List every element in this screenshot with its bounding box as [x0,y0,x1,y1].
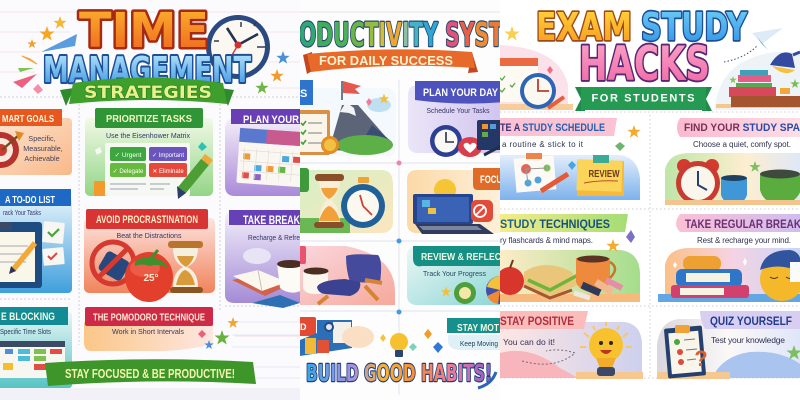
chart: eisenhower matrix: ✓ Urgent [115,152,142,159]
panel: exam study hacks [496,0,800,400]
title: STUDY: STUDY [641,5,747,49]
heading: plan your: PLAN YOUR [243,114,299,126]
icon: gear heart [454,282,476,304]
panel: time blocking [0,307,72,388]
heading: create a study schedule: TE A STUDY SCHEDULE [500,122,605,134]
icon: armchair [317,254,382,304]
icon: paper plane [724,28,783,62]
icon: pie chart [486,276,514,304]
banner: for daily success: FOR DAILY SUCCESS [319,53,453,68]
icon: cloud [243,248,271,264]
heading: prioritize tasks: PRIORITIZE TASKS [106,113,192,125]
icon: star [504,26,520,40]
icon: green diamond [615,142,625,151]
title: TIME: TIME [79,3,209,59]
banner: stay focused and be productive: STAY FOCUSED & BE PRODUCTIVE! [65,366,235,381]
heading fragment: goals: S [300,88,307,100]
icon: tablet schedule [477,120,507,155]
chart: eisenhower matrix: ✓ Important [152,153,184,159]
heading fragment red: D [300,322,307,332]
heading fragment [296,168,309,192]
banner: strategies [60,78,234,106]
card: review and reflect [407,246,514,305]
text: track your tasks: rack Your Tasks [3,210,41,217]
icon: heart badge [321,136,339,154]
text: beat the distractions: Beat the Distractions [116,233,182,240]
heading: create a study schedule [500,118,617,136]
banner: for daily success [303,49,478,74]
panel: prioritize tasks [85,108,213,199]
text: routine: a routine & stick to it [502,140,584,149]
card: create a study schedule [500,118,641,200]
footer text: build good habits: BUILD GOOD HABITS! [306,361,492,387]
icon: sleeping moon with nightcap [760,250,800,301]
illustration: plane lamp and books [715,28,800,110]
card: stay positive [500,311,643,379]
heading: pomodoro technique: THE POMODORO TECHNIQUE [93,312,205,324]
icon: check note red [42,247,65,266]
icon: star [379,94,389,103]
panel: to-do list [0,189,72,293]
icon: open book [232,270,287,296]
icon: coffee cup [303,268,328,294]
icon: calendar [236,128,300,188]
icon: no sign [471,200,493,222]
icon: tomato timer: 25° [143,273,159,284]
card: find your study space [665,118,800,205]
icon: apple [496,260,524,295]
arrow: dotted curve [522,350,575,364]
icon: no phone sign [92,242,134,284]
icon: heart bubble [458,137,482,157]
icon: pink sparkle [366,98,372,106]
heading: focus: FOCU [480,174,502,186]
icon: clock [520,73,556,109]
card: build illustration [296,317,374,356]
text: specific time slots: Specific Time Slots [0,329,51,336]
text: smart goal criteria: Achievable [24,154,60,163]
banner: for students: FOR STUDENTS [592,92,694,104]
heading: study techniques: STUDY TECHNIQUES [500,217,610,231]
title: HACKS: HACKS [579,37,710,92]
title: EXAM: EXAM [536,5,632,49]
icon: quiz clipboard [664,325,708,379]
icon: review sticky note: REVIEW [588,169,620,180]
icon: hourglass [168,241,203,293]
icon: book stack [729,70,800,107]
icon: laptop [413,194,494,234]
card: set goals illustration [297,80,396,156]
icon: target with arrow [0,131,24,168]
title: MANAGEMENT: MANAGEMENT [43,50,251,91]
icon: stars near footer [198,317,239,349]
panel: avoid procrastination [84,209,215,302]
icon: purple sparkle [626,230,635,243]
card: focus [407,168,505,234]
card: study techniques [496,214,640,302]
title: productivity system: ODUCTIVITY SYST [299,15,503,54]
icon: orange square note [94,181,105,196]
icon: hourglass [314,174,344,228]
chart: eisenhower matrix: ✓ Delegate [113,169,144,175]
icon: clock [430,125,462,157]
icon: decorative stars and confetti top left [13,16,290,94]
chart: eisenhower matrix: ✕ Eliminate [152,169,184,175]
icon: smiling light bulb [580,322,632,376]
icon: pencil [548,97,564,108]
icon: star [729,76,737,83]
icon: schedule board [0,341,65,378]
heading: review and reflect: REVIEW & REFLEC [421,251,501,263]
banner: strategies: STRATEGIES [84,83,212,103]
panel: time management strategies [0,0,312,400]
illustration: calendar and clock [496,26,573,110]
heading: stay motivated: STAY MOT [457,322,499,334]
text: schedule your tasks: Schedule Your Tasks [426,108,490,115]
chart: eisenhower matrix [105,143,190,196]
text: eisenhower matrix: Use the Eisenhower Matrix [106,133,190,140]
icon: rolled scroll [683,256,721,271]
text: choose a quiet spot: Choose a quiet, comfy spot. [693,140,791,149]
icon: clipboard with pencil [0,222,42,288]
heading: smart goals: MART GOALS [2,114,54,125]
icon: alarm clock [676,159,720,205]
card: stay motivated [447,318,505,350]
decor: peach blob [342,326,374,348]
text: smart goal criteria: Specific, [28,134,56,143]
icon: checklist clipboard [297,110,330,155]
heading: blocking: E BLOCKING [1,311,55,323]
text: track your progress: Track Your Progress [423,271,486,278]
heading: avoid procrastination: AVOID PROCRASTINATION [96,214,198,226]
icon: stopwatch [341,177,385,228]
heading: take break: TAKE BREAK [243,215,301,227]
icon: green bowl [760,170,800,204]
icon: wall clock [206,15,270,79]
card: quiz yourself [657,311,800,379]
icon: blue screen with folders [300,320,352,356]
card: plan your day [408,81,507,157]
icon: coffee mug [576,256,615,292]
icon: sandwich [524,265,578,298]
panel: take break [225,210,305,308]
banner: for students [575,87,712,111]
icon: curved arrow [478,372,496,388]
icon: blue cup [721,175,747,204]
icon: mountain with flag [329,81,393,155]
icon: coffee cup [277,260,300,293]
icon: review sticky note [576,155,624,196]
heading: plan your day: PLAN YOUR DAY [423,87,499,99]
panel: smart goals [0,109,72,175]
icon: mind map paper [514,153,556,193]
text: smart goal criteria: Measurable, [23,144,63,153]
icon: pencil [177,157,209,199]
text: you can do it: You can do it! [503,337,555,347]
icon: bulb and sparkles [380,329,443,357]
banner: stay focused and be productive [45,359,256,386]
icon: desk lamp [770,52,800,73]
icon: book stack [671,269,749,298]
icon: star [786,345,800,359]
panel: plan your [225,109,300,196]
icon: heading fragment red [296,246,306,264]
icon: erasers and chalk [574,280,622,298]
icon: star [441,286,451,296]
icon: star [606,239,620,252]
icon: star [749,161,761,172]
card: take regular breaks [658,214,800,302]
icon: check note green [42,221,65,244]
heading: to-do list: A TO-DO LIST [5,194,55,206]
divider dots [396,160,402,314]
card: focus timer illustration [296,168,393,233]
icon: calendar [496,58,538,102]
panel: productivity system [296,0,514,400]
heading: stay positive: STAY POSITIVE [500,314,574,328]
icon: star [627,125,641,138]
panel: pomodoro technique [84,307,213,351]
text: test your knowledge: Test your knowledge [711,335,785,345]
text: recharge and refresh: Recharge & Refre [248,235,300,242]
icon: red pencil [541,174,568,191]
text: work in short intervals: Work in Short Intervals [112,329,184,336]
card: take a break chair illustration [296,246,395,305]
text: rest and recharge: Rest & recharge your mind. [697,236,791,245]
text: flashcards: ry flashcards & mind maps. [500,236,593,245]
icon: light bulb [434,179,456,212]
icon: quiz clipboard: ? [694,346,708,371]
text: keep moving: Keep Moving [460,341,498,348]
